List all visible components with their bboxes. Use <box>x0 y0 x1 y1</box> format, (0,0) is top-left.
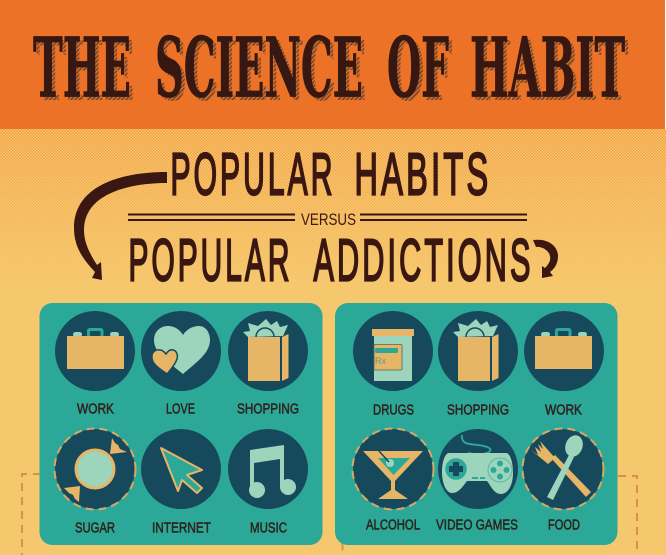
dashed connector: right group left <box>342 469 353 555</box>
icon: drugs jar <box>353 311 433 391</box>
title banner: SCIENCE <box>158 24 366 120</box>
label: work: WORK <box>545 402 582 418</box>
icon: work briefcase <box>55 311 135 391</box>
arrow: small curved question mark <box>533 240 558 278</box>
label: shopping: SHOPPING <box>237 400 299 418</box>
title banner <box>0 0 665 129</box>
icon: shopping bag <box>228 311 308 391</box>
icon: shopping bag <box>438 311 518 391</box>
icon: sugar candy <box>54 428 136 510</box>
icon: video games controller <box>438 429 518 509</box>
icon: food fork and spoon <box>522 428 604 510</box>
title banner: THE <box>36 24 134 120</box>
arrow: large curved <box>74 172 167 280</box>
label: shopping: SHOPPING <box>447 402 509 418</box>
versus divider: VERSUS <box>301 210 356 229</box>
icon: internet cursor <box>141 429 221 509</box>
panel: popular addictions <box>335 303 618 545</box>
icon: love hearts <box>141 311 221 391</box>
label: video games: VIDEO GAMES <box>436 516 518 534</box>
label: alcohol: ALCOHOL <box>366 516 420 534</box>
heading: popular habits: HABITS <box>354 142 492 208</box>
title: THE <box>33 20 131 116</box>
label: drugs: DRUGS <box>373 402 414 418</box>
dashed connector: right group right <box>604 476 637 555</box>
label: love: LOVE <box>166 400 195 418</box>
icon: drugs jar: Rx <box>375 356 386 366</box>
label: food: FOOD <box>548 516 580 534</box>
background <box>0 129 666 258</box>
label: internet: INTERNET <box>152 520 211 536</box>
label: music: MUSIC <box>250 520 287 536</box>
heading: popular addictions: POPULAR <box>128 228 292 294</box>
icon: work briefcase <box>524 311 604 391</box>
title <box>33 20 625 116</box>
title banner: OF <box>390 24 452 120</box>
heading: popular habits: POPULAR <box>170 142 336 208</box>
icon: alcohol martini <box>352 428 434 510</box>
icon: music note <box>228 429 308 509</box>
dashed connector: left <box>22 474 55 555</box>
title: OF <box>387 20 449 116</box>
label: sugar: SUGAR <box>75 520 115 536</box>
panel: popular habits <box>40 303 322 545</box>
title: SCIENCE <box>155 20 363 116</box>
label: work: WORK <box>77 400 114 418</box>
